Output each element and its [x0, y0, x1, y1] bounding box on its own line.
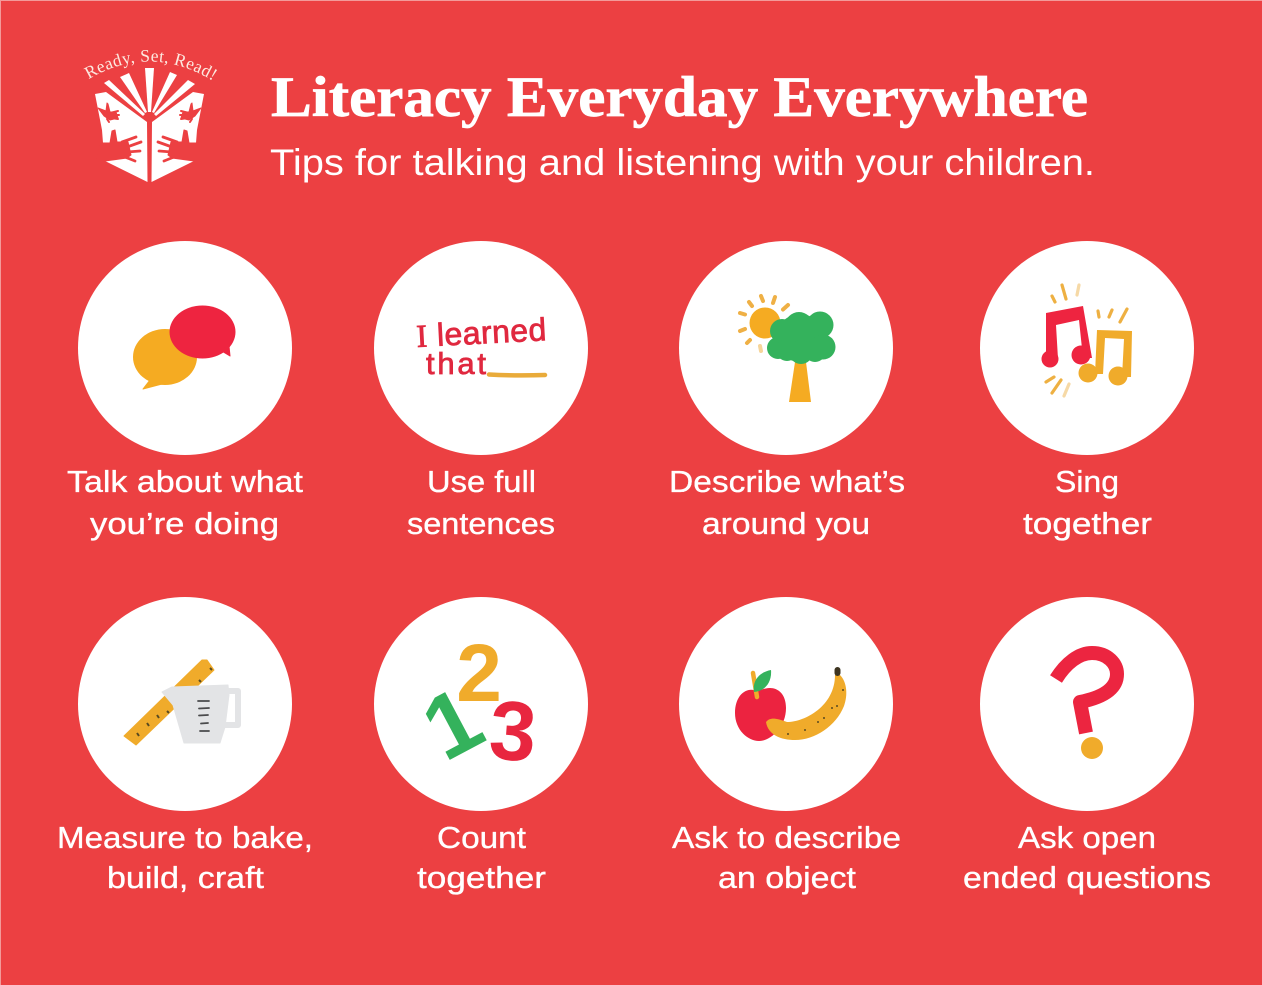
panel: count together	[374, 597, 588, 895]
panel: use full sentences: sentences	[407, 506, 555, 541]
icon: numbers 1 2 3: 3	[486, 682, 540, 779]
panel: count together: together	[417, 860, 546, 895]
logo: left page and hands	[95, 92, 148, 182]
panel: describe what's around you	[669, 241, 905, 541]
panel: measure to bake, build, craft	[57, 597, 313, 895]
panel: ask open ended questions: ended questions	[963, 860, 1211, 895]
icon: numbers 1 2 3: 1	[407, 668, 498, 780]
panel: talk about what you're doing	[67, 241, 303, 541]
icon: I learned that	[415, 311, 547, 381]
icon: ruler and measuring cup	[124, 660, 238, 745]
panel: ask open ended questions: Ask open	[1018, 820, 1156, 855]
icon: question mark	[1056, 653, 1117, 759]
logo: Ready, Set, Read!	[84, 50, 217, 182]
panel: use full sentences: Use full	[427, 464, 536, 499]
panel: describe what's around you: around you	[702, 506, 870, 541]
icon: I learned that: I learned	[415, 311, 547, 354]
icon: speech bubbles	[133, 306, 236, 389]
panel: ask to describe an object	[672, 597, 901, 895]
logo rays	[104, 68, 195, 116]
panel: ask open ended questions	[963, 597, 1211, 895]
icon: numbers 1 2 3	[407, 628, 540, 780]
panel: sing together	[980, 241, 1194, 541]
title: Literacy Everyday Everywhere	[271, 66, 1088, 129]
panel: ask to describe an object: Ask to describe	[672, 820, 901, 855]
logo: Ready, Set, Read!: Ready, Set, Read!	[84, 50, 217, 80]
icon: I learned that: that	[426, 346, 486, 381]
panel: sing together: Sing	[1055, 464, 1119, 499]
panel: measure to bake, build, craft: Measure to bake,	[57, 820, 313, 855]
panel: count together: Count	[437, 820, 526, 855]
panel: talk about what you're doing: Talk about what	[67, 464, 303, 499]
panel: ask to describe an object: an object	[718, 860, 856, 895]
panel: describe what's around you: Describe what’s	[669, 464, 905, 499]
icon: apple and banana	[735, 667, 846, 741]
logo: right page and hands	[152, 92, 204, 182]
icon: numbers 1 2 3: 2	[456, 628, 502, 719]
panel: use full sentences	[374, 241, 588, 541]
icon: sun and tree	[740, 296, 836, 402]
icon: music notes	[1042, 285, 1132, 396]
panel: talk about what you're doing: you’re doing	[90, 506, 279, 541]
panel: sing together: together	[1023, 506, 1152, 541]
panel: measure to bake, build, craft: build, craft	[107, 860, 264, 895]
subtitle: Tips for talking and listening with your children.	[270, 142, 1095, 183]
